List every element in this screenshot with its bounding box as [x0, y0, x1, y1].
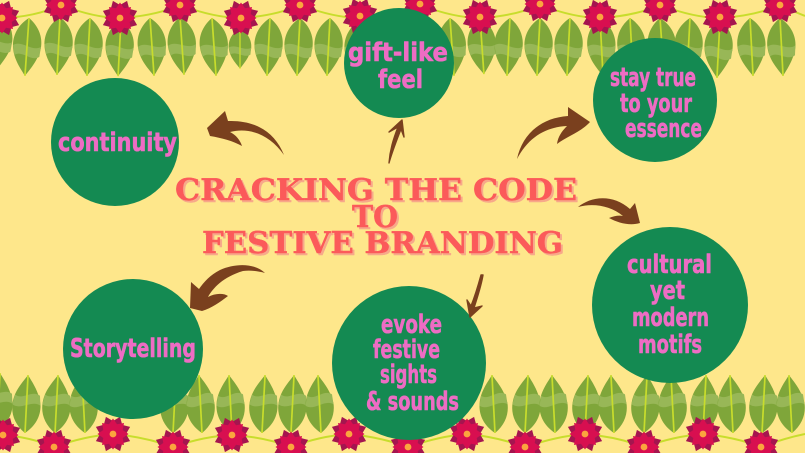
- arrow: to continuity: [207, 111, 284, 155]
- title: [175, 173, 579, 263]
- circle: cultural yet modern motifs: modern: [632, 303, 709, 333]
- arrow: to evoke festive sights and sounds: [467, 275, 483, 317]
- circle: evoke festive sights and sounds: & sounds: [366, 387, 459, 417]
- circle: cultural yet modern motifs: [592, 227, 748, 383]
- circle: stay true to your essence: to your: [620, 89, 692, 119]
- circle: storytelling: [63, 279, 203, 419]
- circle: evoke festive sights and sounds: festive: [373, 335, 440, 365]
- title: TO: [354, 202, 400, 237]
- arrow: to storytelling: [190, 265, 265, 311]
- arrow: to cultural yet modern motifs: [578, 198, 640, 224]
- circle: stay true to your essence: [593, 38, 717, 162]
- circle: continuity: [51, 78, 179, 206]
- circle: stay true to your essence: stay true: [610, 63, 696, 93]
- top garland: [0, 0, 805, 79]
- title: TO: [352, 200, 398, 235]
- circle: cultural yet modern motifs: yet: [650, 276, 685, 306]
- circle: stay true to your essence: essence: [625, 114, 702, 144]
- arrow: to stay true to your essence: [517, 107, 590, 159]
- circle: cultural yet modern motifs: motifs: [638, 330, 702, 360]
- circle: continuity: continuity: [58, 128, 177, 158]
- circle: storytelling: Storytelling: [70, 334, 196, 364]
- title: FESTIVE BRANDING: [204, 228, 565, 263]
- title: CRACKING THE CODE: [175, 173, 577, 208]
- circle: gift-like feel: gift-like: [348, 38, 448, 68]
- title: CRACKING THE CODE: [177, 175, 579, 210]
- circle: gift-like feel: [344, 8, 454, 118]
- circle: evoke festive sights and sounds: sights: [380, 360, 437, 390]
- circle: evoke festive sights and sounds: evoke: [381, 310, 442, 340]
- circle: gift-like feel: feel: [378, 65, 423, 95]
- bottom garland: [0, 372, 805, 453]
- arrow: to gift-like feel: [389, 120, 404, 163]
- circle: evoke festive sights and sounds: [332, 286, 486, 440]
- circle: cultural yet modern motifs: cultural: [627, 250, 712, 280]
- title: FESTIVE BRANDING: [202, 226, 563, 261]
